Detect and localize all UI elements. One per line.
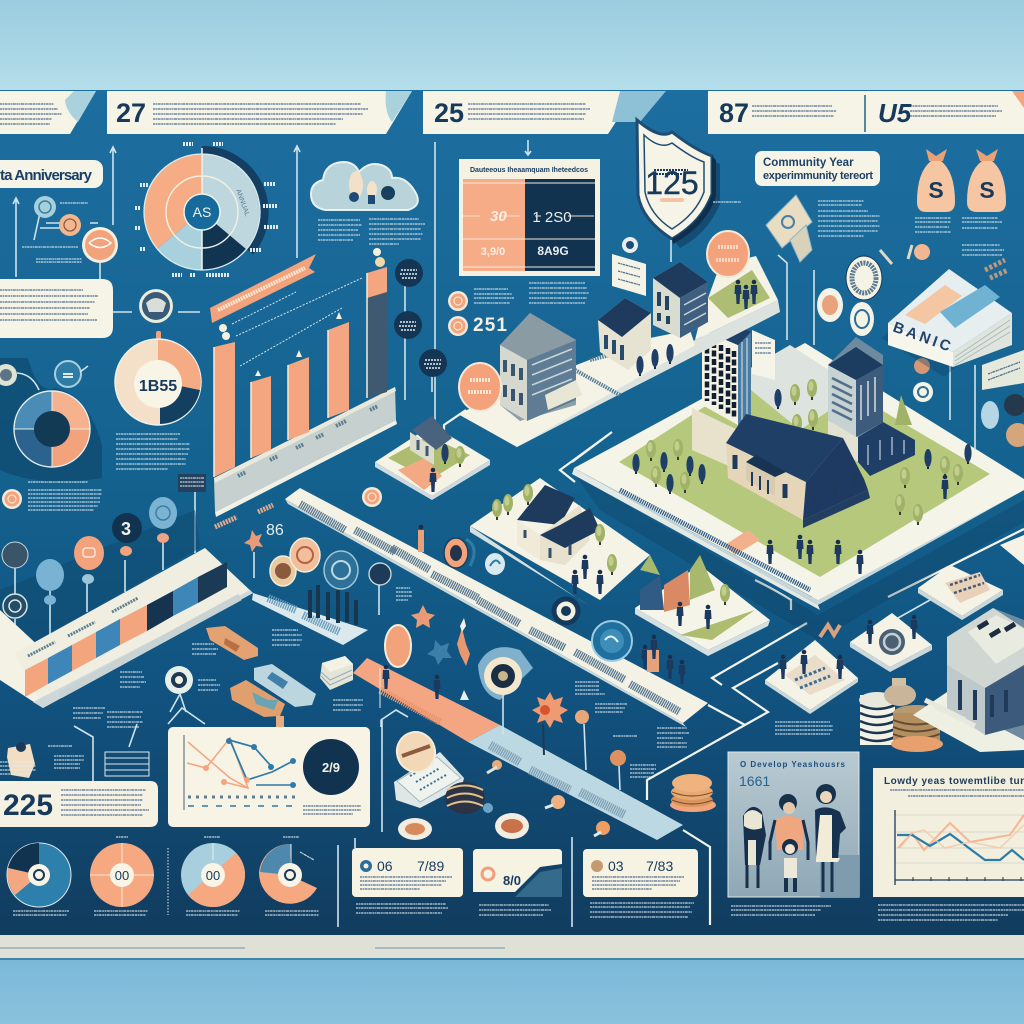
header card 4: 87: U5 <box>878 98 912 128</box>
header card 1 <box>0 91 96 134</box>
cloud caption text <box>318 219 425 244</box>
3D bar chart <box>214 248 397 517</box>
ribbon banner <box>210 254 362 366</box>
card: 03 7/83: 7/83 <box>646 858 673 874</box>
icon: round portrait badge <box>139 289 173 323</box>
shield emblem <box>637 120 741 262</box>
right apartment tower <box>828 337 883 437</box>
table panel: 30 <box>490 208 507 225</box>
upper block <box>612 254 708 338</box>
card: 06 7/89 <box>352 848 463 897</box>
pill label: anniversary <box>0 160 103 188</box>
book stack <box>320 656 353 690</box>
mid text snippets <box>73 630 363 727</box>
community pill: Community Year <box>763 157 854 169</box>
side label tag <box>982 350 1024 390</box>
small diorama: cottage <box>375 416 490 500</box>
navy building middle <box>598 298 674 376</box>
community pill <box>755 151 880 186</box>
card: swirl with 8/0: 8/0 <box>503 873 521 888</box>
community pill: experimmunity tereort <box>763 170 873 182</box>
card: 03 7/83 <box>583 849 698 897</box>
table caption and stats: 251 <box>473 315 507 336</box>
gray apartment block <box>500 313 582 421</box>
right column captions <box>818 201 1004 255</box>
car icons <box>206 626 316 738</box>
wallet and phone group <box>392 728 610 840</box>
family illustration panel: O Develop Yeashousrs <box>740 760 846 769</box>
bank building <box>913 608 1024 752</box>
header card 4: 87 <box>708 91 1024 134</box>
table panel: 1 2S0 <box>532 209 572 226</box>
pill label: anniversary: ta Anniversary <box>0 167 93 184</box>
newspaper stack labelled BANIC: BANIC <box>891 319 953 355</box>
money bags: S <box>928 177 944 203</box>
left mini table and icon group <box>0 742 149 778</box>
radial chart: ANNUAL <box>234 188 250 217</box>
badges along walkway <box>215 487 505 628</box>
line chart panel <box>873 768 1024 897</box>
line chart card <box>168 727 370 827</box>
stripe wall chevron <box>0 548 253 708</box>
pie chart 2 <box>90 837 154 915</box>
tilted certificates <box>766 195 812 262</box>
bottom captions and dividers <box>338 837 1024 927</box>
pie chart 4 <box>259 837 319 915</box>
pie chart 2: 00 <box>115 868 129 883</box>
stat card 225: 225 <box>3 789 53 822</box>
bottom footer strip <box>0 935 1024 960</box>
figures and badges on orange beam <box>380 618 689 790</box>
diorama trees left <box>632 379 818 494</box>
table panel: Dauteeous Iheaamquam Iheteedcos <box>470 167 588 174</box>
header card 3: 25: 25 <box>434 98 464 128</box>
diagonal walkway beam <box>285 488 708 727</box>
shield emblem: 125 <box>645 165 699 201</box>
small medal on pin <box>165 666 193 712</box>
background top band <box>0 0 1024 92</box>
figure: woman right <box>815 784 846 892</box>
donut chart left <box>0 358 102 482</box>
lollipop markers timeline <box>2 497 177 650</box>
card: swirl with 8/0 <box>473 849 562 897</box>
diorama: lower garden <box>635 555 770 656</box>
card: 06 7/89: 06 <box>377 858 393 874</box>
orange bread-like coin stack <box>670 774 716 812</box>
newspaper stack labelled BANIC <box>882 269 1012 377</box>
tall black-window tower <box>692 319 775 470</box>
connector arrows top left <box>13 140 531 430</box>
pie chart 3 <box>168 837 245 915</box>
small activity platforms <box>657 535 1024 734</box>
table panel <box>459 159 600 276</box>
icon group: three connected badges <box>22 196 118 280</box>
header card 2: 27: 27 <box>116 98 146 128</box>
diagonal orange and blue beam <box>353 658 683 840</box>
small connector lines middle <box>74 708 408 848</box>
dark round tags <box>394 259 447 400</box>
money bags <box>917 149 1006 212</box>
donut caption <box>2 482 102 510</box>
card: 06 7/89: 7/89 <box>417 858 444 874</box>
card: 03 7/83: 03 <box>608 858 624 874</box>
gauge caption <box>116 434 190 469</box>
family illustration panel <box>728 752 859 897</box>
header card 3: 25 <box>423 91 666 134</box>
radial chart <box>135 144 278 275</box>
line chart card: 2/9 <box>322 760 340 775</box>
oval stamps <box>778 244 1024 450</box>
header card 2: 27 <box>107 91 412 134</box>
group of people with round badge <box>554 599 686 684</box>
light blue wall section <box>252 585 368 645</box>
background bottom band <box>0 950 1024 1024</box>
orange seal badges <box>459 231 758 411</box>
gauge donut 1B55: 1B55 <box>139 378 177 395</box>
main house <box>726 414 870 528</box>
radial chart: AS <box>193 204 211 220</box>
table panel: 8A9G <box>537 244 569 258</box>
cloud illustration <box>311 162 418 210</box>
pennant sign <box>178 474 206 553</box>
gauge donut 1B55 <box>115 331 201 425</box>
platform with mid-rise buildings <box>458 231 780 447</box>
park shadow <box>575 475 1024 640</box>
callout card left <box>0 279 200 338</box>
table caption and stats <box>448 283 589 336</box>
stat card 225 <box>0 781 158 827</box>
money bags: S <box>979 177 995 203</box>
line chart panel: Lowdy yeas towemtlibe tur <box>884 776 1024 787</box>
diorama: big square park with house <box>572 319 1024 610</box>
figure: child <box>782 839 798 892</box>
figure: adult middle <box>770 794 808 860</box>
lollipop markers timeline: 3 <box>121 519 131 539</box>
figure: woman left <box>743 807 766 888</box>
coin stacks <box>859 678 943 752</box>
lower right building base <box>828 395 915 476</box>
diorama: house cluster <box>470 478 650 606</box>
dark band behind lollipops <box>0 510 200 653</box>
park figures and trees right <box>620 444 972 590</box>
badges along walkway: 86 <box>266 522 284 539</box>
family illustration panel: 1661 <box>739 773 770 789</box>
connector polylines <box>444 410 1024 925</box>
header card 4: 87: 87 <box>719 98 749 128</box>
pie chart 3: 00 <box>206 868 220 883</box>
pie chart 1 <box>7 843 71 915</box>
table panel: 3,9/0 <box>481 246 505 258</box>
